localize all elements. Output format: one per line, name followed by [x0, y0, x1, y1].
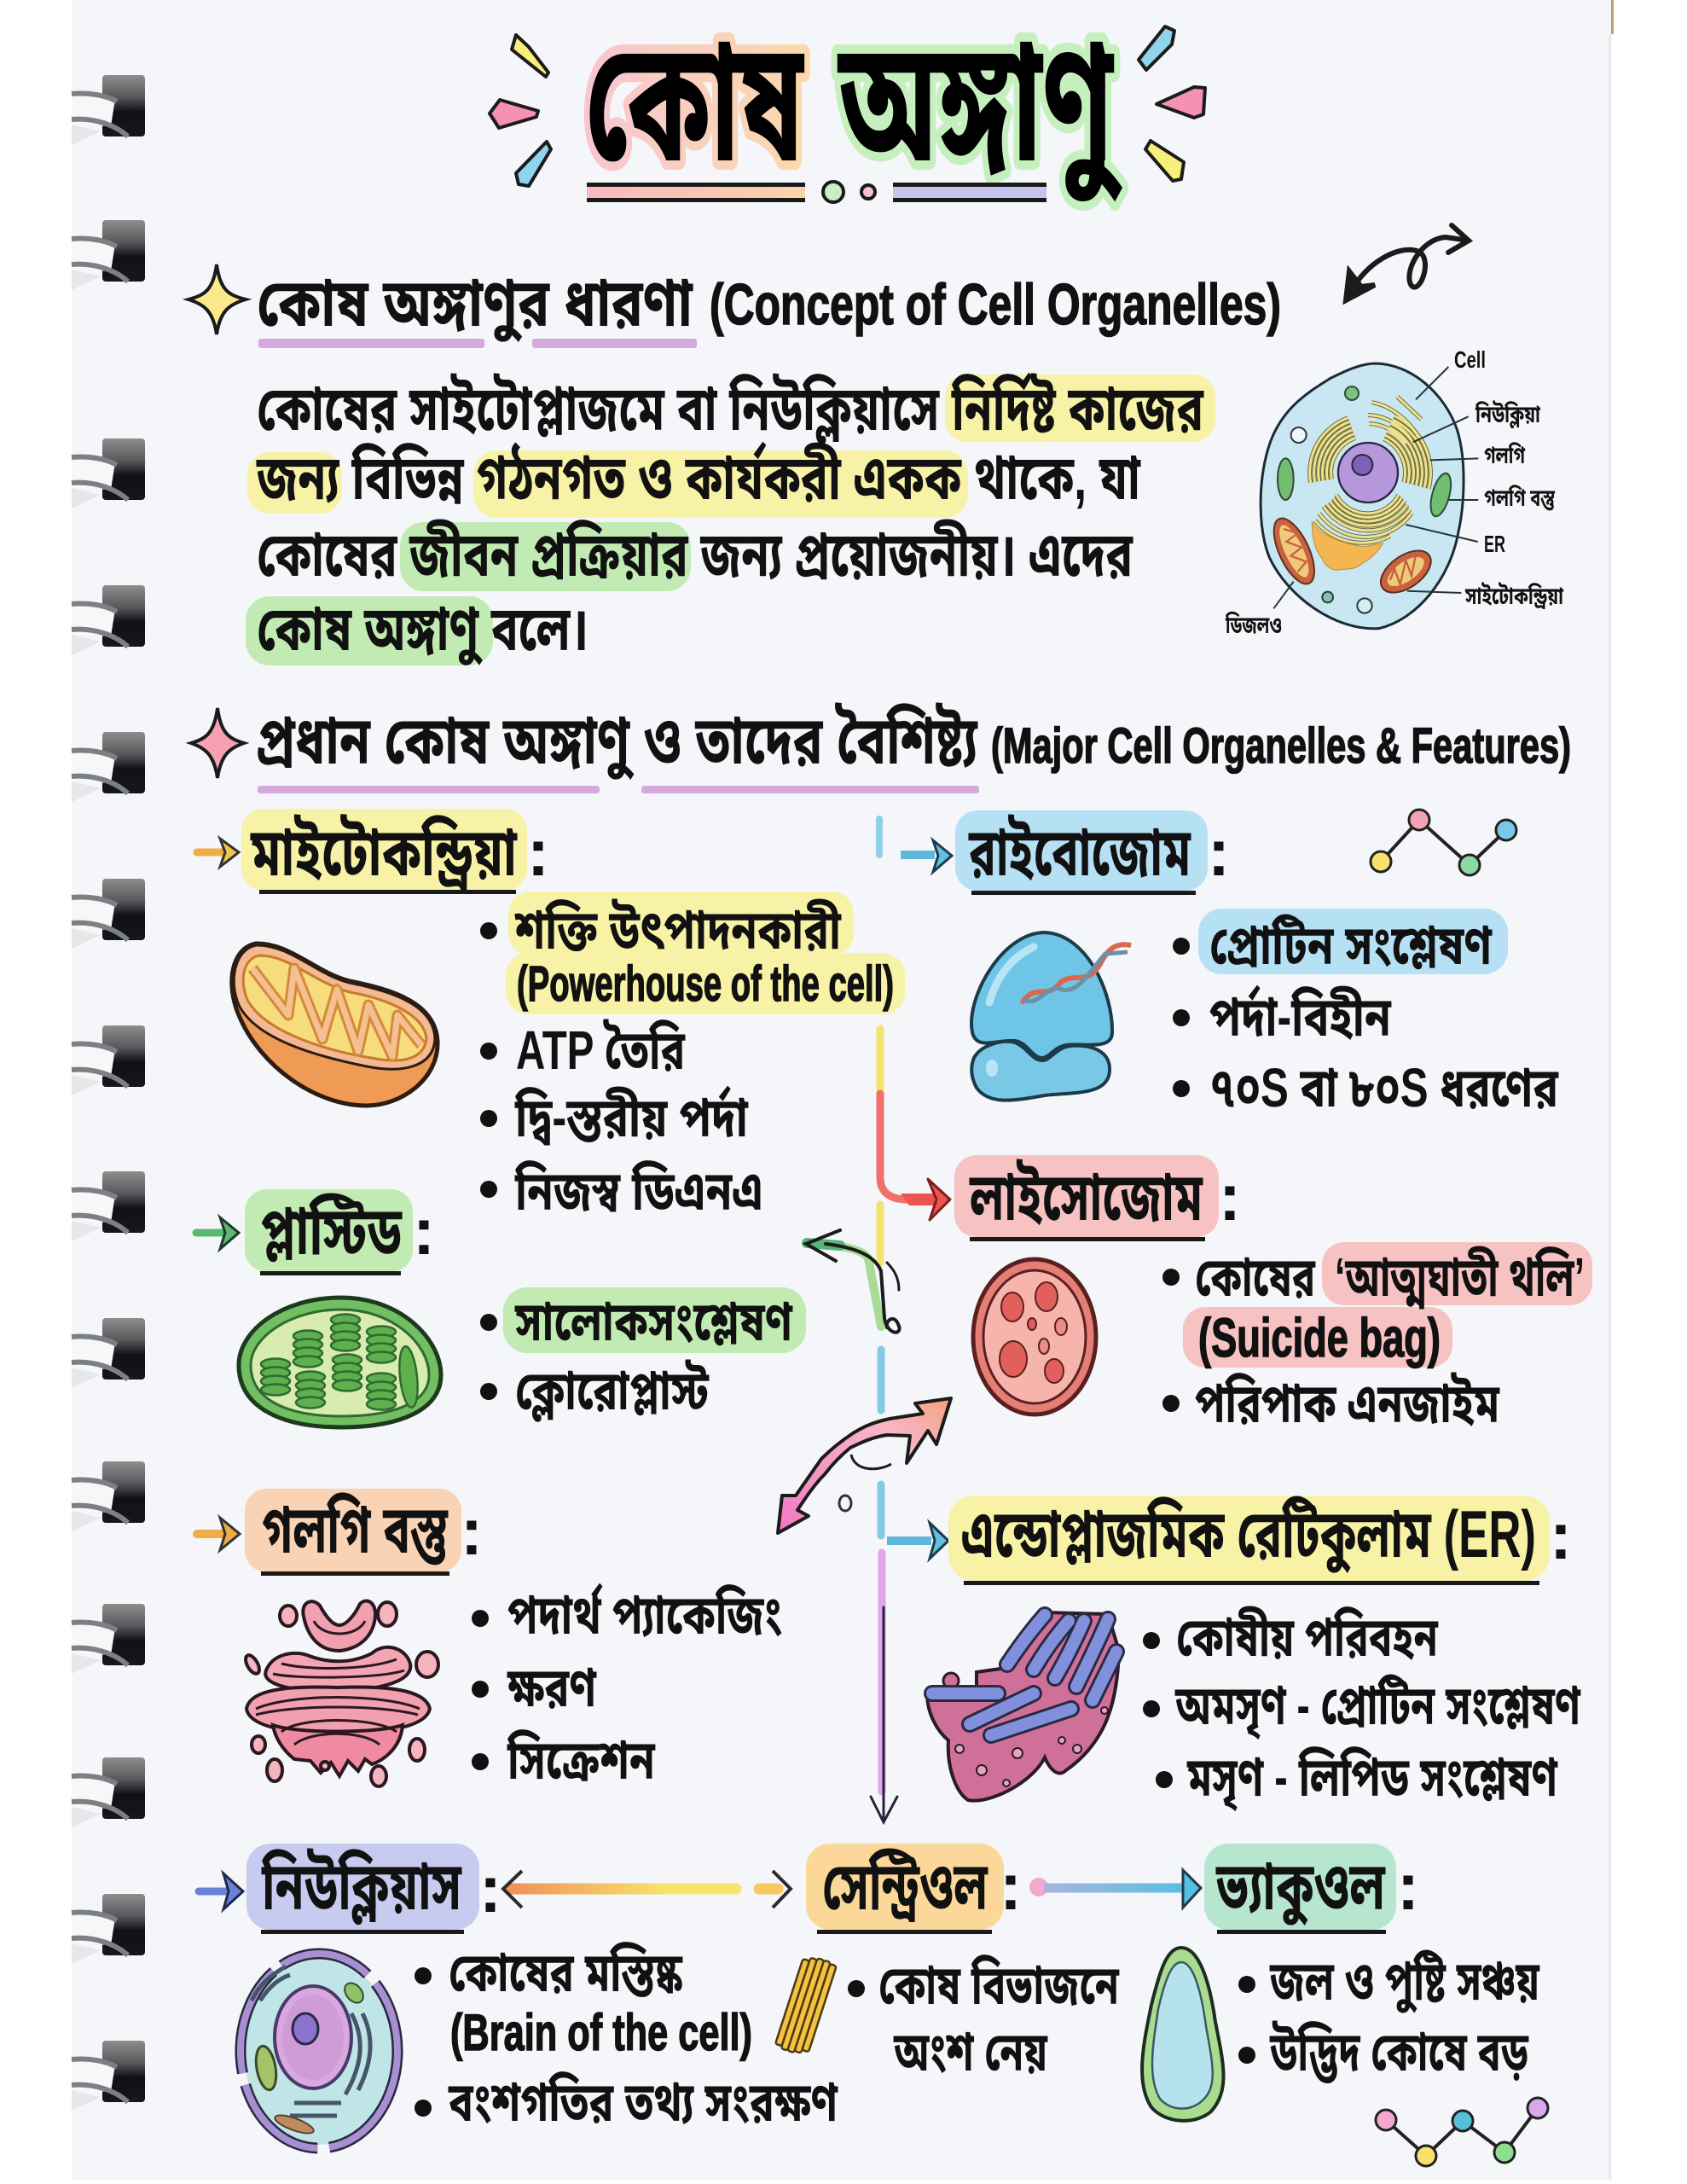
heading: vacuole: : — [1397, 1849, 1419, 1924]
bullets: golgi: পদার্থ প্যাকেজিং — [507, 1582, 782, 1646]
bullets: ER — [1143, 1606, 1581, 1812]
icon: vacuole — [1142, 1948, 1224, 2121]
heading: concept of cell organelles: (Concept of Cell Organelles) — [710, 272, 1281, 337]
icon: pink star — [191, 708, 244, 778]
diagram: labelled animal cell: গলগি বস্তু — [1484, 484, 1555, 511]
bullets: ER: মসৃণ - লিপিড সংশ্লেষণ — [1186, 1745, 1558, 1812]
arrow: pink double arrow — [778, 1398, 951, 1533]
bullets: ribosome: প্রোটিন সংশ্লেষণ — [1209, 914, 1493, 976]
arrow: mitochondria — [197, 839, 239, 867]
heading: major cell organelles: প্রধান কোষ অঙ্গাণু ও তাদের বৈশিষ্ট্য — [256, 703, 978, 780]
bullets: mitochondria: শক্তি উৎপাদনকারী — [514, 897, 842, 961]
heading: centriole: সেন্ট্রিওল — [822, 1849, 988, 1924]
squiggle dots top right — [1371, 810, 1516, 875]
squiggle dots bottom right — [1376, 2098, 1548, 2166]
heading: lysosome: লাইসোজোম — [969, 1159, 1203, 1234]
icon: golgi apparatus — [243, 1600, 438, 1786]
panel: centriole — [774, 1844, 1120, 2082]
heading: concept of cell organelles: কোষ অঙ্গাণুর ধারণা — [257, 265, 693, 342]
bullets: plastid: সালোকসংশ্লেষণ — [514, 1291, 793, 1352]
bullets: mitochondria: নিজস্ব ডিএনএ — [514, 1159, 763, 1222]
paragraph text: কোষের সাইটোপ্লাজমে বা নিউক্লিয়াসে নির্দিষ্ট কাজের — [257, 372, 1204, 445]
heading: golgi: : — [461, 1494, 483, 1569]
icon: ribosome — [971, 932, 1131, 1101]
bullets: nucleus: (Brain of the cell) — [450, 2004, 752, 2061]
panel: endoplasmic reticulum — [927, 1496, 1581, 1812]
heading: golgi — [245, 1489, 483, 1576]
diagram: labelled animal cell: ER — [1484, 531, 1505, 557]
panel: mitochondria — [197, 809, 905, 1222]
bullets: vacuole: জল ও পুষ্টি সঞ্চয় — [1269, 1949, 1540, 2013]
icon: nucleus cell — [241, 1954, 397, 2148]
bullets: plastid: ক্লোরোপ্লাস্ট — [515, 1359, 710, 1424]
bullets: nucleus: বংশগতির তথ্য সংরক্ষণ — [448, 2071, 838, 2133]
heading: mitochondria: মাইটোকন্ড্রিয়া — [250, 815, 518, 891]
arrow: centriole to vacuole — [1029, 1870, 1201, 1908]
heading: plastid: : — [413, 1194, 435, 1269]
icon: lysosome — [973, 1259, 1096, 1414]
bullets: mitochondria — [480, 892, 905, 1222]
diagram: labelled animal cell: সাইটোকন্ড্রিয়া — [1464, 582, 1564, 609]
arrow: to ribosome — [901, 840, 952, 872]
bullets: ribosome: পর্দা-বিহীন — [1209, 984, 1392, 1048]
bullets: golgi: সিক্রেশন — [507, 1728, 656, 1791]
paragraph text: কোষ অঙ্গাণু বলে। — [257, 595, 588, 665]
heading: ER: : — [1550, 1498, 1572, 1573]
arrow: nucleus — [199, 1873, 243, 1909]
heading: centriole — [806, 1844, 1022, 1934]
bullets: lysosome: ‘আত্মঘাতী থলি’ — [1335, 1245, 1585, 1310]
bullets: lysosome — [1162, 1242, 1592, 1434]
bullets: mitochondria: ATP তৈরি — [516, 1019, 686, 1081]
paragraph text: জন্য বিভিন্ন গঠনগত ও কার্যকরী একক থাকে, যা — [256, 441, 1141, 513]
heading: plastid: প্লাস্টিড — [260, 1194, 403, 1269]
heading: nucleus: নিউক্লিয়াস — [261, 1849, 462, 1926]
paragraph text — [256, 372, 1204, 665]
bullets: nucleus — [415, 1940, 838, 2133]
arrow: plastid — [196, 1217, 239, 1249]
bullets: nucleus: কোষের মস্তিষ্ক — [449, 1940, 682, 2003]
diagram: labelled animal cell: Cell — [1454, 346, 1486, 373]
bullets: centriole: অংশ নেয় — [893, 2021, 1048, 2082]
bullets: ER: কোষীয় পরিবহন — [1176, 1606, 1439, 1668]
panel: vacuole — [1142, 1844, 1540, 2121]
title — [585, 8, 1123, 202]
title: অঙ্গাণু — [838, 8, 1123, 202]
title underline ornament — [587, 182, 1046, 202]
heading: nucleus — [246, 1844, 501, 1934]
bullets: lysosome: কোষের — [1195, 1246, 1316, 1308]
bullets: ribosome — [1173, 909, 1559, 1118]
diagram: labelled animal cell: গলগি — [1484, 441, 1526, 468]
title: কোষ — [585, 8, 804, 196]
icon: yellow star — [188, 264, 246, 334]
diagram: labelled animal cell — [1225, 346, 1564, 638]
bullets: mitochondria: (Powerhouse of the cell) — [517, 956, 894, 1012]
paragraph text: কোষের জীবন প্রক্রিয়ার জন্য প্রয়োজনীয়। এদের — [257, 519, 1133, 590]
heading: vacuole: ভ্যাকুওল — [1215, 1849, 1386, 1926]
bullets: mitochondria: দ্বি-স্তরীয় পর্দা — [514, 1084, 749, 1148]
heading: ribosome: রাইবোজোম — [968, 815, 1191, 890]
bullets: vacuole — [1238, 1949, 1540, 2084]
heading: golgi: গলগি বস্তু — [262, 1492, 449, 1567]
heading: ribosome: : — [1208, 815, 1230, 890]
bullets: golgi — [472, 1582, 782, 1791]
swirl arrow top right — [1346, 225, 1469, 300]
heading: nucleus: : — [479, 1851, 501, 1926]
icon: centriole — [774, 1954, 837, 2057]
panel: golgi — [197, 1489, 782, 1791]
title decorative sparks — [490, 26, 1205, 186]
icon: ER — [927, 1612, 1119, 1801]
bullets: vacuole: উদ্ভিদ কোষে বড় — [1269, 2019, 1529, 2084]
arrow: nucleus to centriole — [503, 1871, 791, 1908]
bullets: centriole — [848, 1954, 1120, 2082]
heading: lysosome — [954, 1155, 1241, 1241]
arrow: green curl to plastid — [806, 1230, 899, 1333]
heading: centriole: : — [1000, 1849, 1022, 1924]
panel: ribosome — [955, 810, 1559, 1118]
panel: lysosome — [954, 1155, 1592, 1434]
bullets: ribosome: ৭০S বা ৮০S ধরণের — [1209, 1057, 1559, 1118]
bullets: lysosome: পরিপাক এনজাইম — [1195, 1372, 1500, 1434]
bullets: golgi: ক্ষরণ — [507, 1657, 597, 1718]
icon: mitochondrion — [232, 944, 438, 1106]
heading: ribosome — [955, 810, 1230, 895]
spiral binder rings — [72, 75, 145, 2111]
heading: mitochondria: : — [527, 815, 549, 890]
bullets: centriole: কোষ বিভাজনে — [878, 1954, 1120, 2016]
heading: vacuole — [1204, 1844, 1419, 1934]
central connector lines — [871, 819, 930, 1822]
heading: concept of cell organelles — [257, 265, 1281, 348]
paragraph highlights — [246, 375, 1215, 665]
bullets: plastid — [480, 1287, 806, 1424]
icon: chloroplast — [239, 1298, 441, 1427]
heading: lysosome: : — [1219, 1159, 1241, 1234]
arrow: to ER — [887, 1523, 948, 1559]
arrow: to lysosome — [901, 1179, 950, 1220]
panel: nucleus — [199, 1844, 838, 2148]
bullets: lysosome: (Suicide bag) — [1198, 1307, 1441, 1368]
diagram: labelled animal cell: নিউক্লিয়া — [1475, 400, 1541, 428]
panel: plastid — [196, 1189, 806, 1427]
heading: major cell organelles — [256, 703, 1571, 793]
diagram: labelled animal cell: ডিজলও — [1225, 611, 1282, 638]
arrow: golgi — [197, 1518, 240, 1550]
